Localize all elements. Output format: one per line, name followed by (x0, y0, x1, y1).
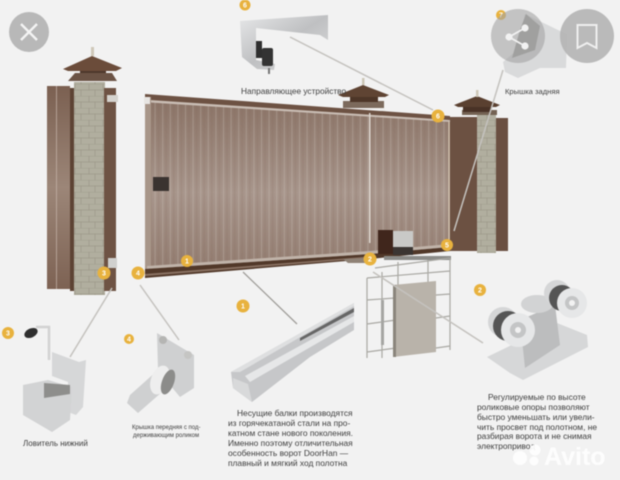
badge 4 gate: 4 (136, 270, 140, 278)
drive motor and foundation frame (367, 230, 451, 358)
badge 6 top (240, 0, 250, 10)
overlay: close button (9, 12, 49, 52)
badge 7 (496, 10, 506, 20)
badge 6 gate (432, 110, 444, 122)
text: roller carriage description: разбирая ворота и не снимая (477, 431, 592, 441)
badge 3 part: 3 (6, 330, 10, 338)
left gate pillar (47, 47, 122, 295)
badge 6 top: 6 (243, 2, 247, 10)
badge 6 gate: 6 (436, 114, 440, 120)
part: lower catcher (23, 326, 86, 432)
label: front cover with roller: Крышка передняя с под- (132, 425, 200, 431)
badge 2 gate (364, 252, 376, 266)
label: lower catcher: Ловитель нижний (23, 439, 88, 448)
badge 5 (441, 239, 453, 251)
badge 7: 7 (499, 12, 503, 20)
watermark: Avito (513, 443, 606, 471)
text: carrying beam description: плавный и мягкий ход полотна (228, 458, 348, 468)
overlay: share button (491, 9, 545, 63)
watermark: Avito: Avito (544, 443, 606, 471)
text: roller carriage description: электропривод (477, 441, 535, 451)
text: roller carriage description: быстро уменьшать или увели- (477, 412, 595, 422)
badge 4 part: 4 (127, 336, 131, 344)
text: carrying beam description: Несущие балки производятся (237, 408, 353, 418)
callout lines (70, 37, 503, 357)
part: guide device (240, 15, 328, 74)
label: front cover with roller: держивающим роликом (133, 433, 199, 439)
badge 1 part (236, 300, 250, 312)
badge 5: 5 (445, 242, 449, 250)
part: rear cover (503, 14, 567, 78)
overlay: bookmark button (560, 9, 614, 63)
text: carrying beam description: Именно поэтому отличительная (228, 438, 353, 448)
badge 2 part: 2 (478, 288, 482, 294)
label: guide device: Направляющее устройство (241, 86, 346, 96)
text: roller carriage description: Регулируемые по высоте (488, 392, 586, 402)
badge 2 part (474, 284, 486, 296)
text: carrying beam description: особенность ворот DoorHan — (228, 448, 349, 458)
centre roof (338, 78, 389, 116)
badge 3 gate: 3 (102, 270, 106, 278)
label: rear cover: Крышка задняя (505, 87, 560, 96)
part: front cover with roller (127, 333, 194, 413)
part: carrying beam (231, 303, 354, 402)
badge 1 gate (181, 255, 193, 267)
gate leaf (144, 94, 450, 278)
badge 1 gate: 1 (185, 258, 189, 266)
badge 4 gate (132, 266, 144, 280)
text: roller carriage description: чить просвет под полотном, не (477, 422, 597, 432)
badge 1 part: 1 (241, 304, 245, 310)
text: carrying beam description: катном стане нового поколения. (228, 428, 353, 438)
text: carrying beam description: из горячекатаной стали на про- (228, 418, 350, 428)
gate illustration (47, 47, 508, 358)
badge 3 gate (98, 266, 110, 280)
right gate pillar (450, 90, 508, 253)
badge 4 part (124, 334, 134, 344)
part: roller carriage (487, 280, 588, 380)
badge 3 part (2, 327, 14, 339)
text: roller carriage description: роликовые опоры позволяют (477, 402, 590, 412)
badge 2 gate: 2 (368, 256, 372, 264)
number badges (2, 0, 506, 344)
